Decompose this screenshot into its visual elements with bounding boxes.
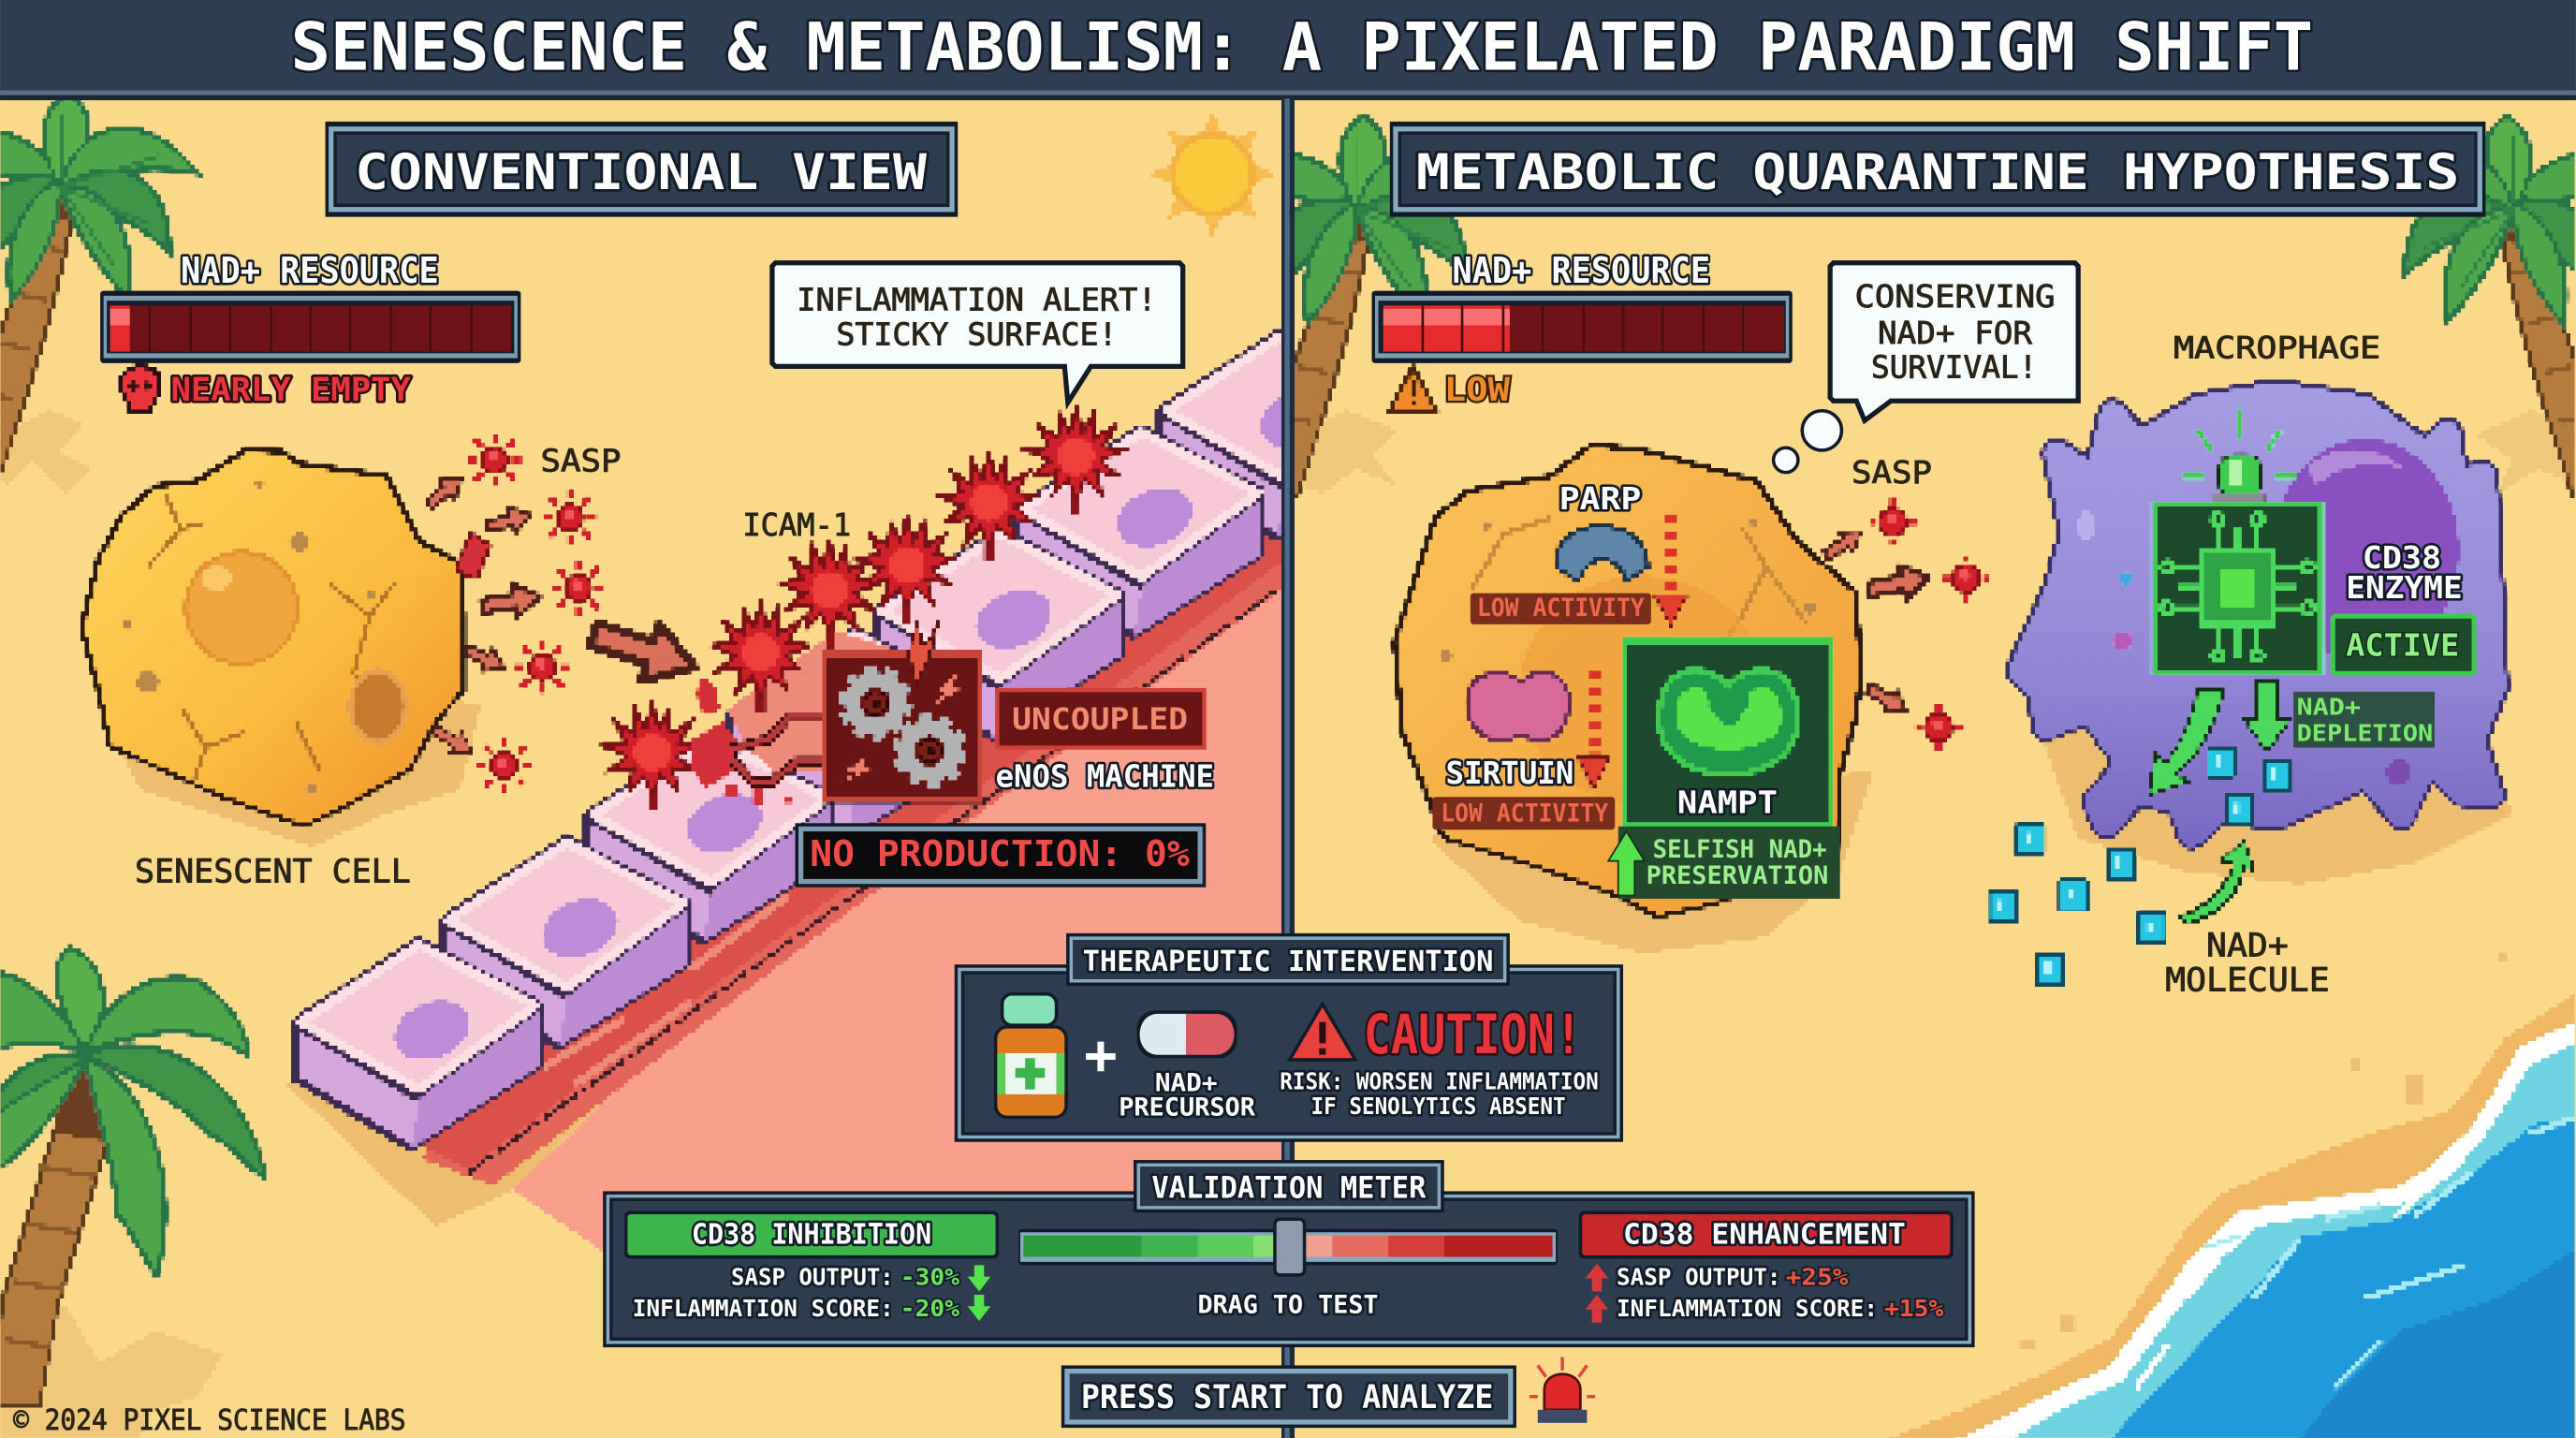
outline — [2021, 394, 2494, 835]
icon: sirtuin — [1467, 672, 1569, 741]
SASP particles and arrows left — [421, 433, 703, 792]
tag: uncoupled: UNCOUPLED — [1012, 703, 1188, 737]
up arrow — [1608, 831, 1645, 895]
speech bubble: conserving NAD+: SURVIVAL! — [1871, 349, 2037, 386]
right panel left palm — [1295, 114, 1467, 498]
bar frame — [1372, 291, 1793, 363]
circuit traces — [2172, 524, 2304, 657]
speech bubble: conserving NAD+: NAD+ FOR — [1878, 315, 2033, 351]
eNOS machine — [822, 618, 983, 803]
tag: active: ACTIVE — [2346, 626, 2459, 663]
button: CD38 enhancement: CD38 ENHANCEMENT — [1623, 1219, 1906, 1252]
macrophage — [2021, 394, 2513, 884]
alarm light — [2182, 411, 2297, 507]
right NAD+ resource gauge — [1372, 250, 1793, 363]
cell body — [82, 450, 463, 827]
speech bubble: inflammation alert: STICKY SURFACE! — [836, 316, 1117, 353]
uncoupled wires — [731, 716, 822, 782]
tag: active — [2333, 616, 2474, 674]
inflamed surface patch — [729, 631, 920, 772]
stats: enhancement: SASP OUTPUT: — [1617, 1263, 1781, 1290]
tab heading — [1066, 933, 1510, 986]
label: PARP: PARP — [1559, 480, 1641, 517]
stats: enhancement: INFLAMMATION SCORE: — [1617, 1295, 1878, 1322]
palm shadows on sand — [0, 411, 2576, 1438]
readout: no production — [795, 823, 1206, 888]
arrow: sirtuin decline — [1577, 670, 1610, 788]
center divider — [1281, 98, 1295, 1438]
callout: selfish NAD+ preservation: PRESERVATION — [1647, 862, 1828, 890]
label: NAD+ depletion: DEPLETION — [2297, 720, 2433, 747]
slider handle — [1275, 1219, 1305, 1275]
bar segments — [110, 305, 511, 352]
heading: conventional view: CONVENTIONAL VIEW — [355, 144, 927, 201]
cracks — [1471, 518, 1808, 666]
slider — [1018, 1219, 1558, 1275]
icon: skull — [122, 367, 159, 411]
label: CD38 enzyme — [2346, 539, 2463, 606]
right panel right palm — [2402, 114, 2574, 498]
ICAM-1 adhesion spikes — [605, 411, 1123, 812]
label: senescent cell: SENESCENT CELL — [135, 852, 411, 890]
label: NAD+ molecule — [2165, 926, 2330, 999]
shadow — [2037, 723, 2513, 884]
speech bubble: inflammation alert — [772, 263, 1183, 403]
tab heading — [1134, 1160, 1444, 1212]
label: CD38 enzyme: CD38 — [2363, 539, 2441, 576]
icon: caution triangle — [1290, 1004, 1355, 1060]
cell body — [1395, 446, 1862, 917]
nucleus — [2272, 439, 2459, 662]
trunk — [0, 1117, 111, 1406]
top-left palm tree — [0, 94, 196, 472]
CD38 chip — [2154, 411, 2321, 672]
NAD+ molecules — [1988, 746, 2291, 986]
callout: selfish NAD+ preservation — [1608, 827, 1840, 899]
label: drag to test: DRAG TO TEST — [1197, 1291, 1379, 1319]
sun — [1150, 111, 1275, 237]
arrow: PARP decline — [1654, 514, 1687, 626]
red vessel band — [422, 536, 1281, 1184]
cracks — [148, 493, 394, 781]
arrow: molecules to macrophage — [2180, 840, 2254, 923]
arrow: CD38 down — [2244, 682, 2291, 753]
precursor label: NAD+ — [1155, 1069, 1218, 1097]
icon: red alarm — [1530, 1357, 1595, 1423]
tab heading: THERAPEUTIC INTERVENTION — [1083, 946, 1493, 978]
senescent cell — [82, 450, 490, 846]
left NAD+ resource gauge — [100, 250, 520, 363]
tab heading: VALIDATION METER — [1151, 1171, 1427, 1205]
label: NAD+ RESOURCE — [1453, 250, 1710, 292]
fronds — [0, 948, 265, 1275]
label: SASP left: SASP — [540, 443, 621, 479]
label: CD38 enzyme: ENZYME — [2346, 569, 2463, 606]
label: eNOS machine: eNOS MACHINE — [996, 758, 1214, 795]
shadow — [1429, 772, 1873, 953]
status: low: LOW — [1444, 371, 1511, 409]
button: CD38 inhibition — [624, 1211, 999, 1258]
callout: selfish NAD+ preservation: SELFISH NAD+ — [1653, 836, 1827, 864]
NAMPT machine — [1625, 640, 1832, 827]
senescent cell right — [1395, 446, 1873, 953]
stats: enhancement: +25% — [1786, 1263, 1849, 1290]
label: sirtuin: SIRTUIN — [1445, 755, 1573, 791]
readout: no production: NO PRODUCTION: 0% — [810, 833, 1190, 875]
copyright: © 2024 PIXEL SCIENCE LABS — [13, 1404, 406, 1437]
status: nearly empty: NEARLY EMPTY — [171, 371, 411, 409]
endothelial cell blocks — [294, 333, 1405, 1149]
sand specks — [2021, 953, 2505, 1349]
heading: metabolic quarantine hypothesis: METABOLIC QUARANTINE HYPOTHESIS — [1416, 144, 2459, 201]
heading: metabolic quarantine hypothesis — [1390, 122, 2485, 217]
press start button — [1061, 1365, 1516, 1428]
label: NAMPT: NAMPT — [1677, 785, 1778, 821]
nucleus highlight — [202, 566, 232, 590]
tag: uncoupled — [997, 690, 1204, 748]
label: macrophage: MACROPHAGE — [2174, 332, 2380, 366]
bar frame — [100, 291, 520, 363]
plus — [1086, 1042, 1116, 1071]
label: NAD+ molecule: NAD+ — [2206, 926, 2289, 964]
tag: PARP low activity: LOW ACTIVITY — [1477, 594, 1645, 623]
spots — [1439, 518, 1817, 664]
organelle spots — [124, 479, 374, 795]
title: SENESCENCE & METABOLISM: A PIXELATED PARADIGM SHIFT — [291, 9, 2313, 86]
stats: inhibition — [633, 1263, 990, 1322]
stats: enhancement: +15% — [1884, 1295, 1943, 1322]
button: CD38 enhancement — [1579, 1211, 1954, 1258]
thought bubbles — [1774, 411, 1841, 473]
speech bubble: conserving NAD+: CONSERVING — [1854, 278, 2056, 315]
header bar — [0, 0, 2576, 100]
stats: enhancement — [1586, 1263, 1943, 1323]
salmon endothelial shadow zone — [485, 526, 1281, 1252]
SASP particles right — [1820, 500, 1989, 751]
dark core — [1519, 575, 1766, 805]
icon: supplement bottle — [996, 994, 1066, 1117]
heading: conventional view — [326, 122, 958, 217]
block ground shadow — [287, 1051, 657, 1225]
panel: therapeutic intervention — [955, 933, 1623, 1142]
tag: sirtuin low activity: LOW ACTIVITY — [1441, 800, 1608, 829]
risk text: IF SENOLYTICS ABSENT — [1311, 1093, 1566, 1120]
precursor label: PRECURSOR — [1119, 1094, 1255, 1123]
button: CD38 inhibition: CD38 INHIBITION — [692, 1219, 931, 1252]
risk text — [1280, 1068, 1599, 1120]
secretion blob — [455, 534, 490, 579]
icon: NAMPT enzyme — [1659, 670, 1797, 774]
lightning marks — [909, 618, 940, 683]
bottom-left palm tree — [0, 948, 265, 1406]
panel: validation meter — [603, 1160, 1975, 1347]
vacuole — [350, 670, 406, 742]
precursor label — [1119, 1069, 1255, 1123]
caution label: CAUTION! — [1364, 1003, 1582, 1066]
label: SASP right: SASP — [1852, 454, 1932, 491]
speech bubble: inflammation alert: INFLAMMATION ALERT! — [797, 282, 1157, 318]
label: NAD+ depletion — [2293, 692, 2435, 748]
icon: capsule — [1137, 1010, 1237, 1058]
shadow — [98, 690, 480, 846]
icon: warning triangle — [1390, 368, 1436, 411]
nucleus — [185, 552, 298, 664]
press start button: PRESS START TO ANALYZE — [1081, 1378, 1493, 1416]
body — [2021, 394, 2494, 835]
stats: inhibition: INFLAMMATION SCORE: — [633, 1295, 894, 1322]
icon: PARP — [1556, 526, 1647, 581]
risk text: RISK: WORSEN INFLAMMATION — [1280, 1068, 1599, 1095]
label: NAD+ depletion: NAD+ — [2297, 693, 2361, 720]
damaged cell splatter — [690, 677, 794, 805]
stats: inhibition: -30% — [900, 1263, 959, 1290]
label: NAD+ RESOURCE — [181, 250, 439, 292]
stats: inhibition: SASP OUTPUT: — [731, 1263, 894, 1290]
organelles — [2119, 572, 2132, 585]
stats: inhibition: -20% — [900, 1295, 959, 1322]
label: ICAM-1: ICAM-1 — [742, 506, 851, 543]
ocean shoreline — [1889, 994, 2576, 1438]
arrow: NAD+ into macrophage — [2149, 690, 2224, 795]
speech bubble: conserving NAD+ — [1830, 263, 2078, 420]
highlight — [2308, 449, 2402, 485]
label: NAD+ molecule: MOLECULE — [2165, 961, 2330, 999]
bar segments — [1383, 305, 1784, 352]
